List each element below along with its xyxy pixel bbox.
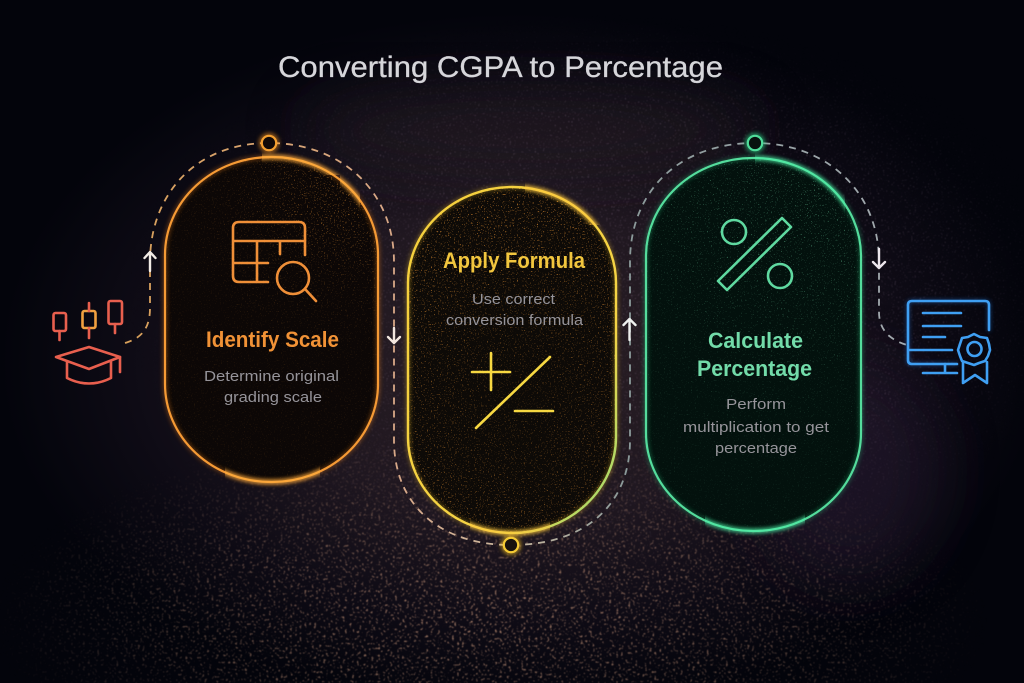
icon: percent [718,218,792,290]
text: identify scale description: grading scale [224,389,322,406]
panel: identify scale [165,157,378,482]
text: identify scale description [204,368,339,406]
text: calculate percentage description: percentage [715,440,797,457]
arrow: up to calculate percentage [624,319,636,340]
text: apply formula description: conversion formula [446,312,584,329]
title: Converting CGPA to Percentage [278,51,723,84]
heading: identify scale: Identify Scale [206,327,339,352]
node: yellow ring [504,538,518,552]
text: calculate percentage description: Perform [726,396,786,413]
text: identify scale description: Determine original [204,368,339,385]
heading: calculate percentage [697,328,812,381]
text: apply formula description: Use correct [472,291,556,308]
arrow: down to apply formula [388,328,400,343]
text: calculate percentage description [683,396,830,457]
panel: apply formula [408,187,616,533]
node: green ring [748,136,762,150]
text: calculate percentage description: multiplication to get [683,419,830,436]
icon: table with magnifier [233,222,316,301]
arrow: up to identify scale [144,252,156,271]
node: orange ring [262,136,276,150]
heading: apply formula: Apply Formula [443,248,586,273]
heading: calculate percentage: Calculate [708,328,803,353]
arrow: down to certificate [873,249,885,268]
icon: plus slash minus [472,353,553,428]
heading: calculate percentage: Percentage [697,356,812,381]
text: apply formula description [446,291,584,329]
icon: certificate on monitor [908,301,990,383]
icon: graduation cap with candles [54,301,122,384]
panel: calculate percentage [646,158,861,531]
dashed connector path [125,143,907,545]
